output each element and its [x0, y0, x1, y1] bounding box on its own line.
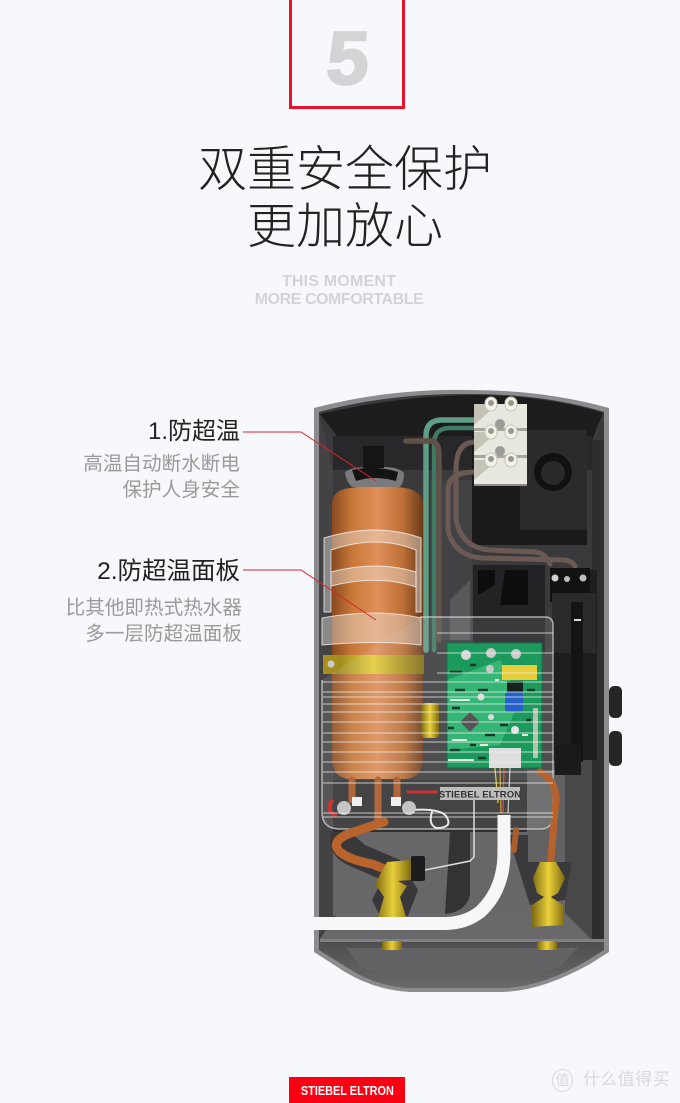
number box	[289, 0, 405, 109]
callout 2 heading: 2.防超温面板	[97, 558, 240, 585]
lower copper pipes	[329, 772, 556, 872]
number 5: 5	[324, 16, 372, 100]
leader line 1	[243, 432, 376, 481]
main title	[198, 130, 492, 258]
brand label: STIEBEL ELTRON	[439, 790, 521, 800]
terminal block	[474, 397, 527, 486]
brass fitting on tank	[421, 703, 439, 738]
copper tank	[332, 446, 423, 779]
callout 1 description: 高温自动断水断电	[83, 453, 240, 475]
watermark text: 什么值得买	[583, 1070, 670, 1089]
yellow clamp	[323, 655, 424, 674]
brass connector right	[532, 862, 565, 950]
brass connector left	[375, 800, 474, 950]
heater casing	[314, 390, 609, 992]
English subtitle: THIS MOMENT	[282, 273, 396, 290]
transparent straps	[322, 530, 421, 645]
terminal wires	[495, 768, 510, 813]
terminal socket	[520, 430, 587, 530]
main title: 更加放心	[247, 187, 443, 258]
callout 2 description: 多一层防超温面板	[85, 623, 242, 645]
main title: 双重安全保护	[198, 130, 492, 201]
callout 1 heading: 1.防超温	[148, 418, 240, 445]
white cable	[314, 815, 504, 924]
screws on tank base	[337, 797, 416, 815]
English subtitle: MORE COMFORTABLE	[255, 291, 423, 308]
callout 1 description	[83, 453, 240, 501]
watermark	[552, 1069, 670, 1092]
callout 2 description	[66, 597, 242, 645]
brand badge: STIEBEL ELTRON	[300, 1083, 394, 1098]
cover ribs	[322, 633, 553, 817]
callout 1 description: 保护人身安全	[122, 479, 240, 501]
transparent cover panel	[322, 617, 553, 829]
English subtitle	[255, 273, 423, 308]
brand badge	[289, 1077, 405, 1103]
screw terminals and switch	[550, 568, 596, 775]
side knobs	[609, 686, 622, 766]
watermark icon: 值	[556, 1072, 570, 1088]
inner shadows	[330, 430, 597, 916]
leader line 2	[243, 570, 376, 620]
watermark icon	[552, 1069, 573, 1092]
circuit board	[447, 643, 542, 768]
callout 2 description: 比其他即热式热水器	[66, 597, 242, 619]
green and brown wires	[406, 420, 575, 650]
